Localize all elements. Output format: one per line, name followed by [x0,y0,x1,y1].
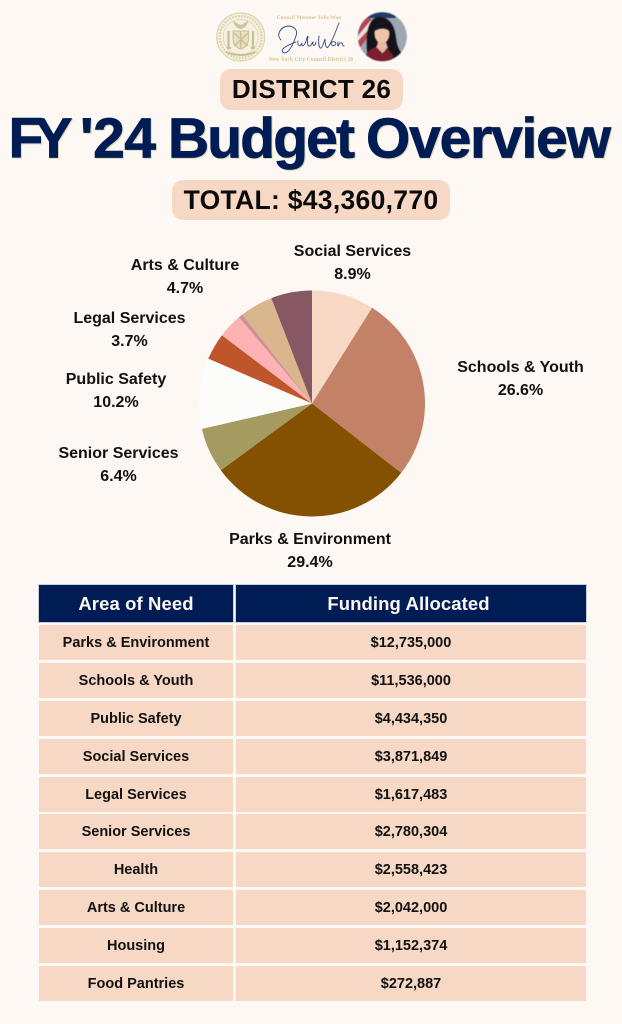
row value: housing: $1,152,374 [375,938,447,954]
row label: social services: Social Services [83,748,189,764]
row value: parks: $12,735,000 [371,634,451,650]
label: legal services: 3.7% [111,332,148,350]
slice: public safety [199,359,312,429]
label: parks and environment [229,531,391,570]
row value: health [236,852,586,887]
label: arts and culture: Arts & Culture [131,257,239,274]
row value: public safety [236,701,586,736]
slice: arts and culture [242,298,312,404]
row label: arts and culture [39,890,233,925]
logo header [216,11,408,63]
row label: public safety [39,701,233,736]
council member caption: Council Member Julie Won [277,15,341,21]
slice: housing [222,317,312,404]
slice: health [271,290,312,404]
label: public safety: Public Safety [66,371,166,388]
row value: arts and culture: $2,042,000 [375,900,447,916]
table header: funding allocated [236,585,586,622]
row label: senior services: Senior Services [82,824,190,840]
funding table [38,584,587,1001]
row value: senior services [236,814,586,849]
slice: food pantries [239,314,312,404]
label: senior services: 6.4% [100,468,137,484]
label: parks and environment: 29.4% [287,554,333,570]
label: arts and culture [131,257,239,296]
row value: schools: $11,536,000 [371,672,451,688]
row label: parks: Parks & Environment [63,634,209,650]
title: Budget [168,106,355,170]
table header: area of need [39,585,233,622]
label: public safety [66,371,166,410]
row value: schools [236,663,586,698]
label: legal services [73,310,186,350]
total badge: TOTAL: $43,360,770 [184,185,438,215]
row value: public safety: $4,434,350 [375,710,447,726]
icon: city seal [217,13,265,61]
slice: legal services [208,335,312,404]
row label: senior services [39,814,233,849]
pie chart [202,290,425,516]
label: schools and youth: 26.6% [498,382,543,398]
row value: social services: $3,871,849 [375,748,447,764]
total badge [172,180,450,220]
row value: health: $2,558,423 [375,862,447,878]
title: Overview [366,106,612,170]
row value: legal services [236,777,586,812]
row value: arts and culture [236,890,586,925]
label: social services [294,243,411,282]
row value: housing [236,928,586,963]
row value: food pantries [236,966,586,1001]
slice: social services [312,290,372,404]
row value: social services [236,739,586,774]
row label: food pantries: Food Pantries [88,976,184,992]
row label: food pantries [39,966,233,1001]
district badge: DISTRICT 26 [232,74,391,104]
title: FY [8,106,72,170]
table header: area of need: Area of Need [78,592,194,614]
row label: legal services [39,777,233,812]
signature [279,23,344,53]
row label: housing [39,928,233,963]
label: social services: 8.9% [334,266,371,282]
label: parks and environment: Parks & Environment [229,531,391,548]
row label: legal services: Legal Services [85,786,187,802]
row label: housing: Housing [107,938,165,954]
row value: legal services: $1,617,483 [375,786,447,802]
label: senior services [58,445,179,484]
label: legal services: Legal Services [73,310,186,327]
label: arts and culture: 4.7% [167,280,203,296]
table header: funding allocated: Funding Allocated [327,592,490,614]
district caption: New York City Council District 26 [269,57,353,63]
district badge [220,69,403,110]
row label: schools [39,663,233,698]
row label: health: Health [114,862,158,878]
slice: senior services [202,404,312,470]
row value: parks [236,625,586,660]
row label: public safety: Public Safety [90,710,182,726]
row label: schools: Schools & Youth [79,672,193,688]
slice: schools and youth [312,308,425,473]
row value: senior services: $2,780,304 [375,824,447,840]
row label: health [39,852,233,887]
title [8,106,612,171]
row label: social services [39,739,233,774]
label: schools and youth [457,359,584,398]
title: '24 [80,106,156,170]
label: senior services: Senior Services [58,445,179,462]
label: schools and youth: Schools & Youth [457,359,584,376]
slice: parks and environment [221,404,401,517]
label: social services: Social Services [294,243,411,260]
label: public safety: 10.2% [93,394,139,410]
row value: food pantries: $272,887 [381,976,441,992]
portrait [357,12,407,62]
row label: parks [39,625,233,660]
row label: arts and culture: Arts & Culture [87,900,185,916]
